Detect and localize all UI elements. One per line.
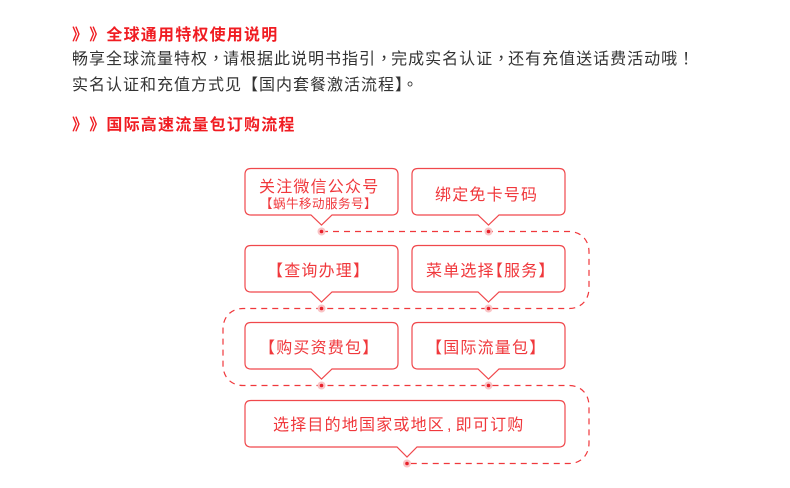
connector dots: [318, 228, 492, 468]
text block: instructions: 实名认证和充值方式见【国内套餐激活流程】。: [72, 71, 419, 95]
step 1: follow WeChat account: [245, 168, 398, 225]
step 2: bind SIM number: [412, 168, 565, 225]
step 7: choose destination and order: 选择目的地国家或地区,即可订购: [273, 416, 524, 434]
step 1: follow WeChat account: 关注微信公众号: [259, 178, 379, 196]
dashed connector path: [223, 232, 589, 464]
step 3: inquiry and handling: [245, 246, 398, 302]
step 5: buy data package: 【购买资费包】: [259, 339, 379, 357]
step 6: international data package: 【国际流量包】: [426, 339, 546, 357]
step 6: international data package: [412, 322, 565, 379]
step 1: follow WeChat account: 【蜗牛移动服务号】: [260, 196, 377, 211]
text block: instructions: 畅享全球流量特权，请根据此说明书指引，完成实名认证，还有充值送话费活动哦！: [72, 45, 695, 69]
step 4: menu select service: [412, 246, 565, 302]
heading: package order flow: 》》国际高速流量包订购流程: [72, 117, 296, 134]
heading: global privilege instructions: 》》全球通用特权使用说明: [72, 27, 278, 44]
step 2: bind SIM number: 绑定免卡号码: [435, 186, 538, 204]
text block: instructions: [72, 45, 695, 95]
step 7: choose destination and order: [245, 400, 565, 457]
step 4: menu select service: 菜单选择【服务】: [426, 262, 556, 280]
step 5: buy data package: [245, 322, 398, 379]
step 3: inquiry and handling: 【查询办理】: [267, 262, 370, 280]
